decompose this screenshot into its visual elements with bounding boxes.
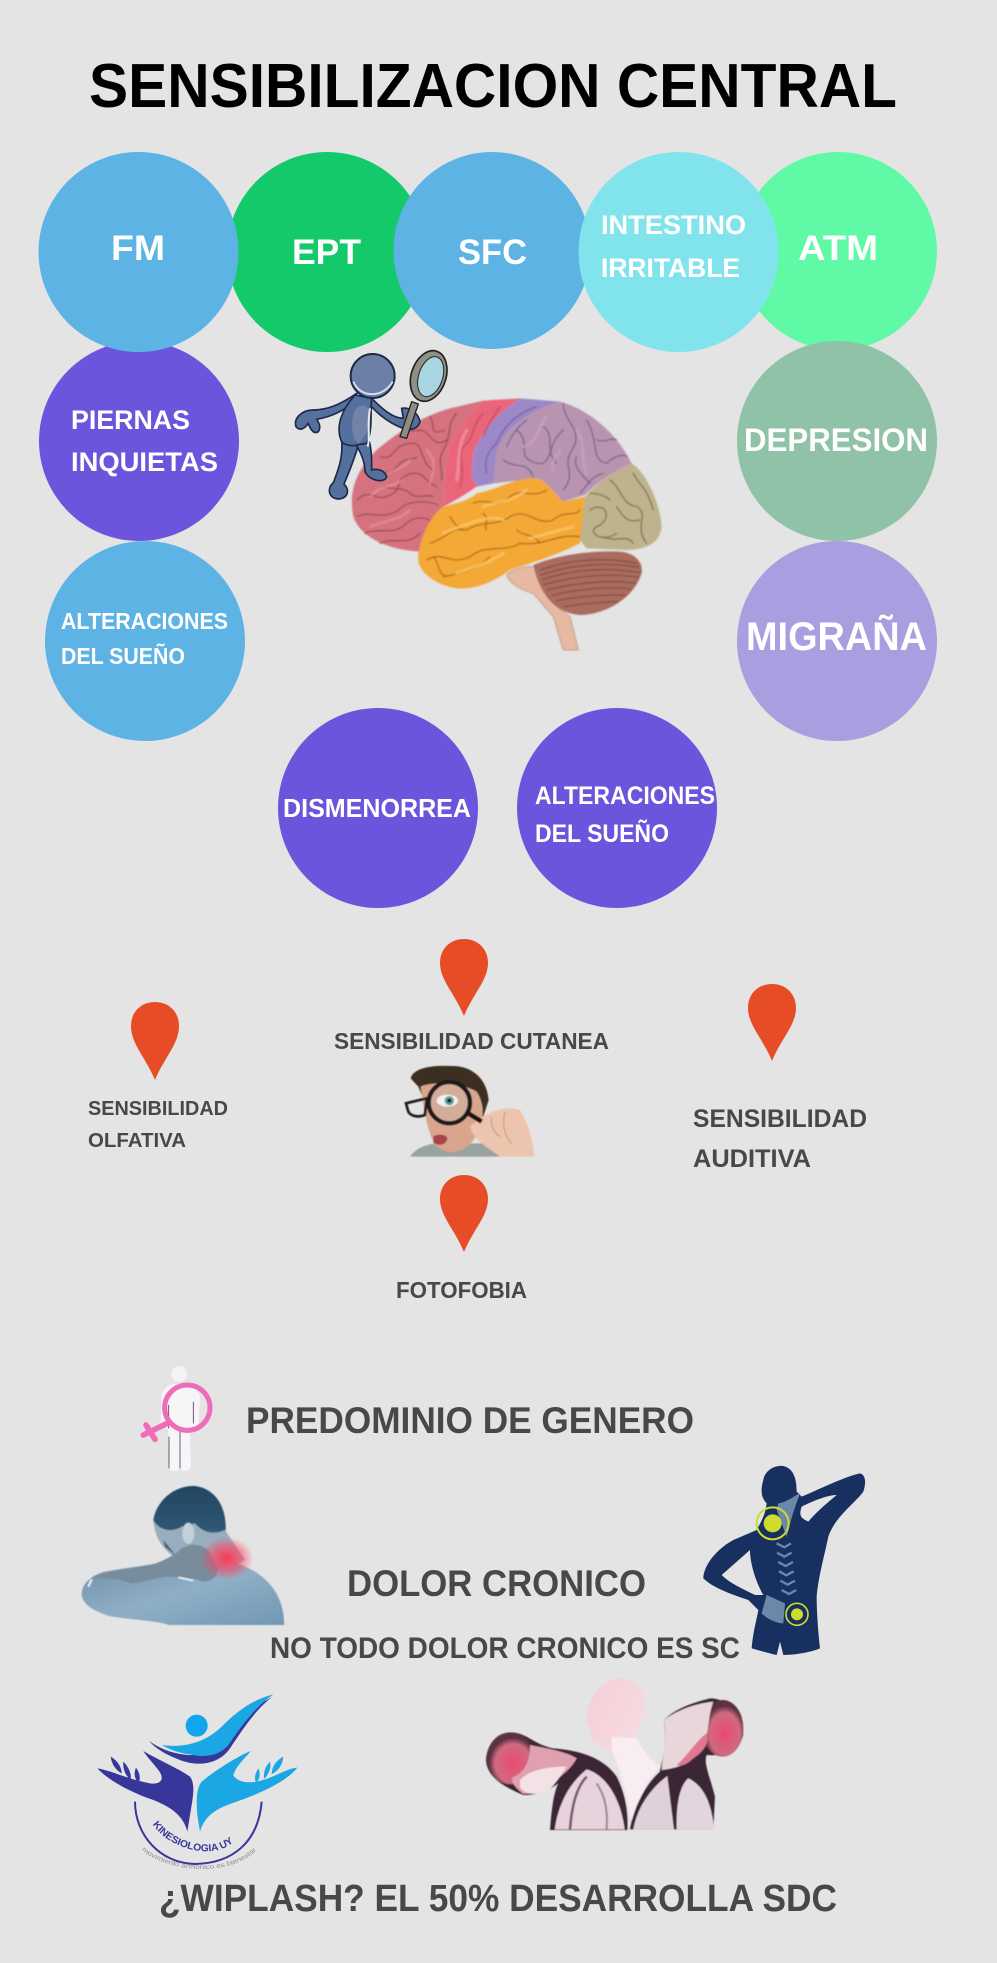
circle: alteraciones del sueño, left [45, 541, 245, 741]
pin: fotofobia [440, 1175, 488, 1252]
closing headline: ¿WIPLASH? EL 50% DESARROLLA SDC [159, 1878, 837, 1920]
label: sensibilidad auditiva: SENSIBILIDAD [693, 1105, 867, 1133]
circle: piernas inquietas: PIERNAS [71, 405, 190, 435]
circle: SFC [394, 152, 590, 349]
circle: migraña [737, 541, 937, 741]
heading: dolor cronico: DOLOR CRONICO [347, 1563, 646, 1604]
heading: predominio de genero: PREDOMINIO DE GENERO [246, 1400, 694, 1441]
icon: figure with magnifying glass [295, 346, 453, 499]
label: sensibilidad olfativa [88, 1098, 228, 1152]
circle: EPT: EPT [292, 233, 361, 272]
pin: auditiva [748, 984, 796, 1061]
label: sensibilidad auditiva [693, 1105, 867, 1173]
circle: SFC: SFC [458, 233, 527, 272]
logo: kinesiologia uy: KINESIOLOGIA UY [153, 1820, 232, 1852]
circle: alteraciones del sueño, left: ALTERACIONES [61, 608, 228, 634]
circle: alteraciones del sueño, center: DEL SUEÑO [535, 818, 669, 848]
image: whiplash figures [486, 1678, 743, 1830]
label: fotofobia: FOTOFOBIA [396, 1277, 527, 1303]
circle: dismenorrea [278, 708, 478, 908]
circle: intestino irritable: INTESTINO [601, 210, 746, 240]
circle: migraña: MIGRAÑA [746, 615, 927, 659]
circle: depresion: DEPRESION [744, 422, 928, 458]
circle: alteraciones del sueño, left: DEL SUEÑO [61, 642, 185, 669]
title: SENSIBILIZACION CENTRAL [89, 52, 897, 121]
circle: piernas inquietas: INQUIETAS [71, 447, 218, 477]
circle: FM [38, 152, 238, 352]
label: sensibilidad olfativa: SENSIBILIDAD [88, 1098, 228, 1120]
logo: kinesiologia uy: movimiento armonico es bienestar [142, 1848, 256, 1869]
image: back figure with pain points [703, 1466, 865, 1655]
circle: alteraciones del sueño, center [517, 708, 717, 908]
label: sensibilidad cutanea: SENSIBILIDAD CUTANEA [334, 1028, 609, 1054]
circle: EPT [227, 152, 427, 352]
circle: intestino irritable: IRRITABLE [601, 253, 740, 283]
circle: ATM: ATM [798, 229, 878, 268]
text: no todo dolor cronico es sc: NO TODO DOLOR CRONICO ES SC [270, 1632, 740, 1665]
circle: dismenorrea: DISMENORREA [283, 793, 471, 823]
logo: kinesiologia uy [97, 1694, 298, 1869]
image: man with neck pain [82, 1486, 284, 1625]
circle: intestino irritable [578, 152, 778, 352]
brain illustration [352, 398, 662, 650]
circle: ATM [739, 152, 937, 350]
circle: depresion [737, 341, 937, 541]
circle: piernas inquietas [39, 341, 239, 541]
pin: olfativa [131, 1002, 179, 1080]
image: man with magnifying glass [406, 1066, 534, 1157]
label: sensibilidad olfativa: OLFATIVA [88, 1130, 186, 1152]
label: sensibilidad auditiva: AUDITIVA [693, 1145, 811, 1173]
icon: female gender figure [143, 1366, 210, 1471]
circle: alteraciones del sueño, center: ALTERACIONES [535, 782, 715, 810]
circle: FM: FM [111, 229, 165, 268]
pin: cutanea [440, 939, 488, 1016]
